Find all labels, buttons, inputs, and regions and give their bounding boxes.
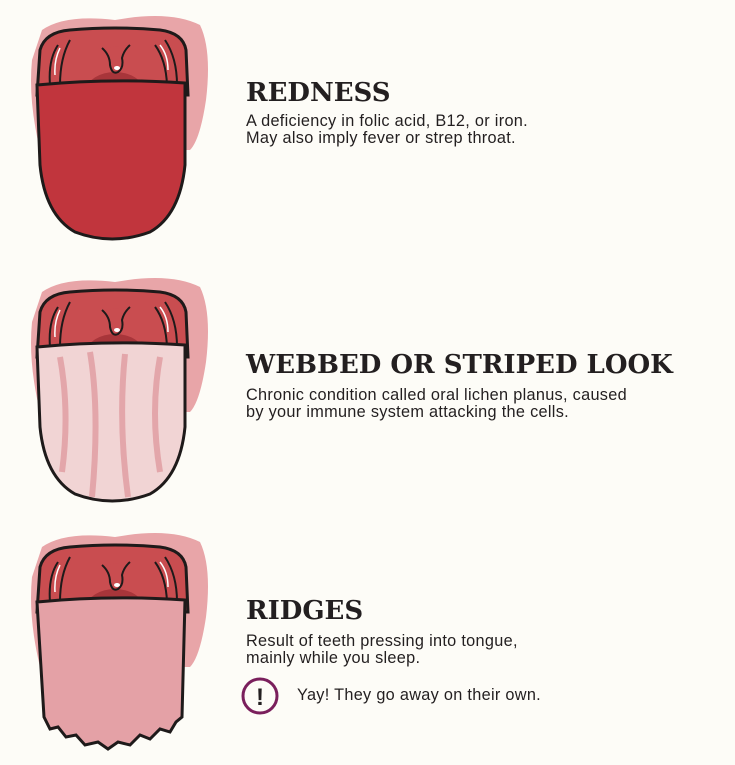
text: webbed: by your immune system attacking the cells. (246, 403, 569, 421)
icon: exclamation (243, 679, 277, 713)
text: redness (246, 112, 528, 147)
text: redness: May also imply fever or strep throat. (246, 129, 516, 147)
illustration: webbed tongue (31, 278, 208, 501)
heading: webbed: WEBBED OR STRIPED LOOK (246, 350, 673, 380)
callout: Yay! They go away on their own. (297, 686, 541, 704)
text: webbed: Chronic condition called oral lichen planus, caused (246, 386, 627, 404)
icon: exclamation: ! (256, 684, 264, 711)
illustration: red tongue (31, 16, 208, 239)
text: redness: A deficiency in folic acid, B12, or iron. (246, 112, 528, 130)
text: webbed (246, 386, 627, 421)
heading: redness: REDNESS (246, 78, 391, 108)
text: ridges: mainly while you sleep. (246, 649, 420, 667)
illustration: ridged tongue (31, 533, 208, 749)
heading: ridges: RIDGES (246, 596, 363, 626)
text: ridges: Result of teeth pressing into tongue, (246, 632, 518, 650)
text: ridges (246, 632, 518, 667)
